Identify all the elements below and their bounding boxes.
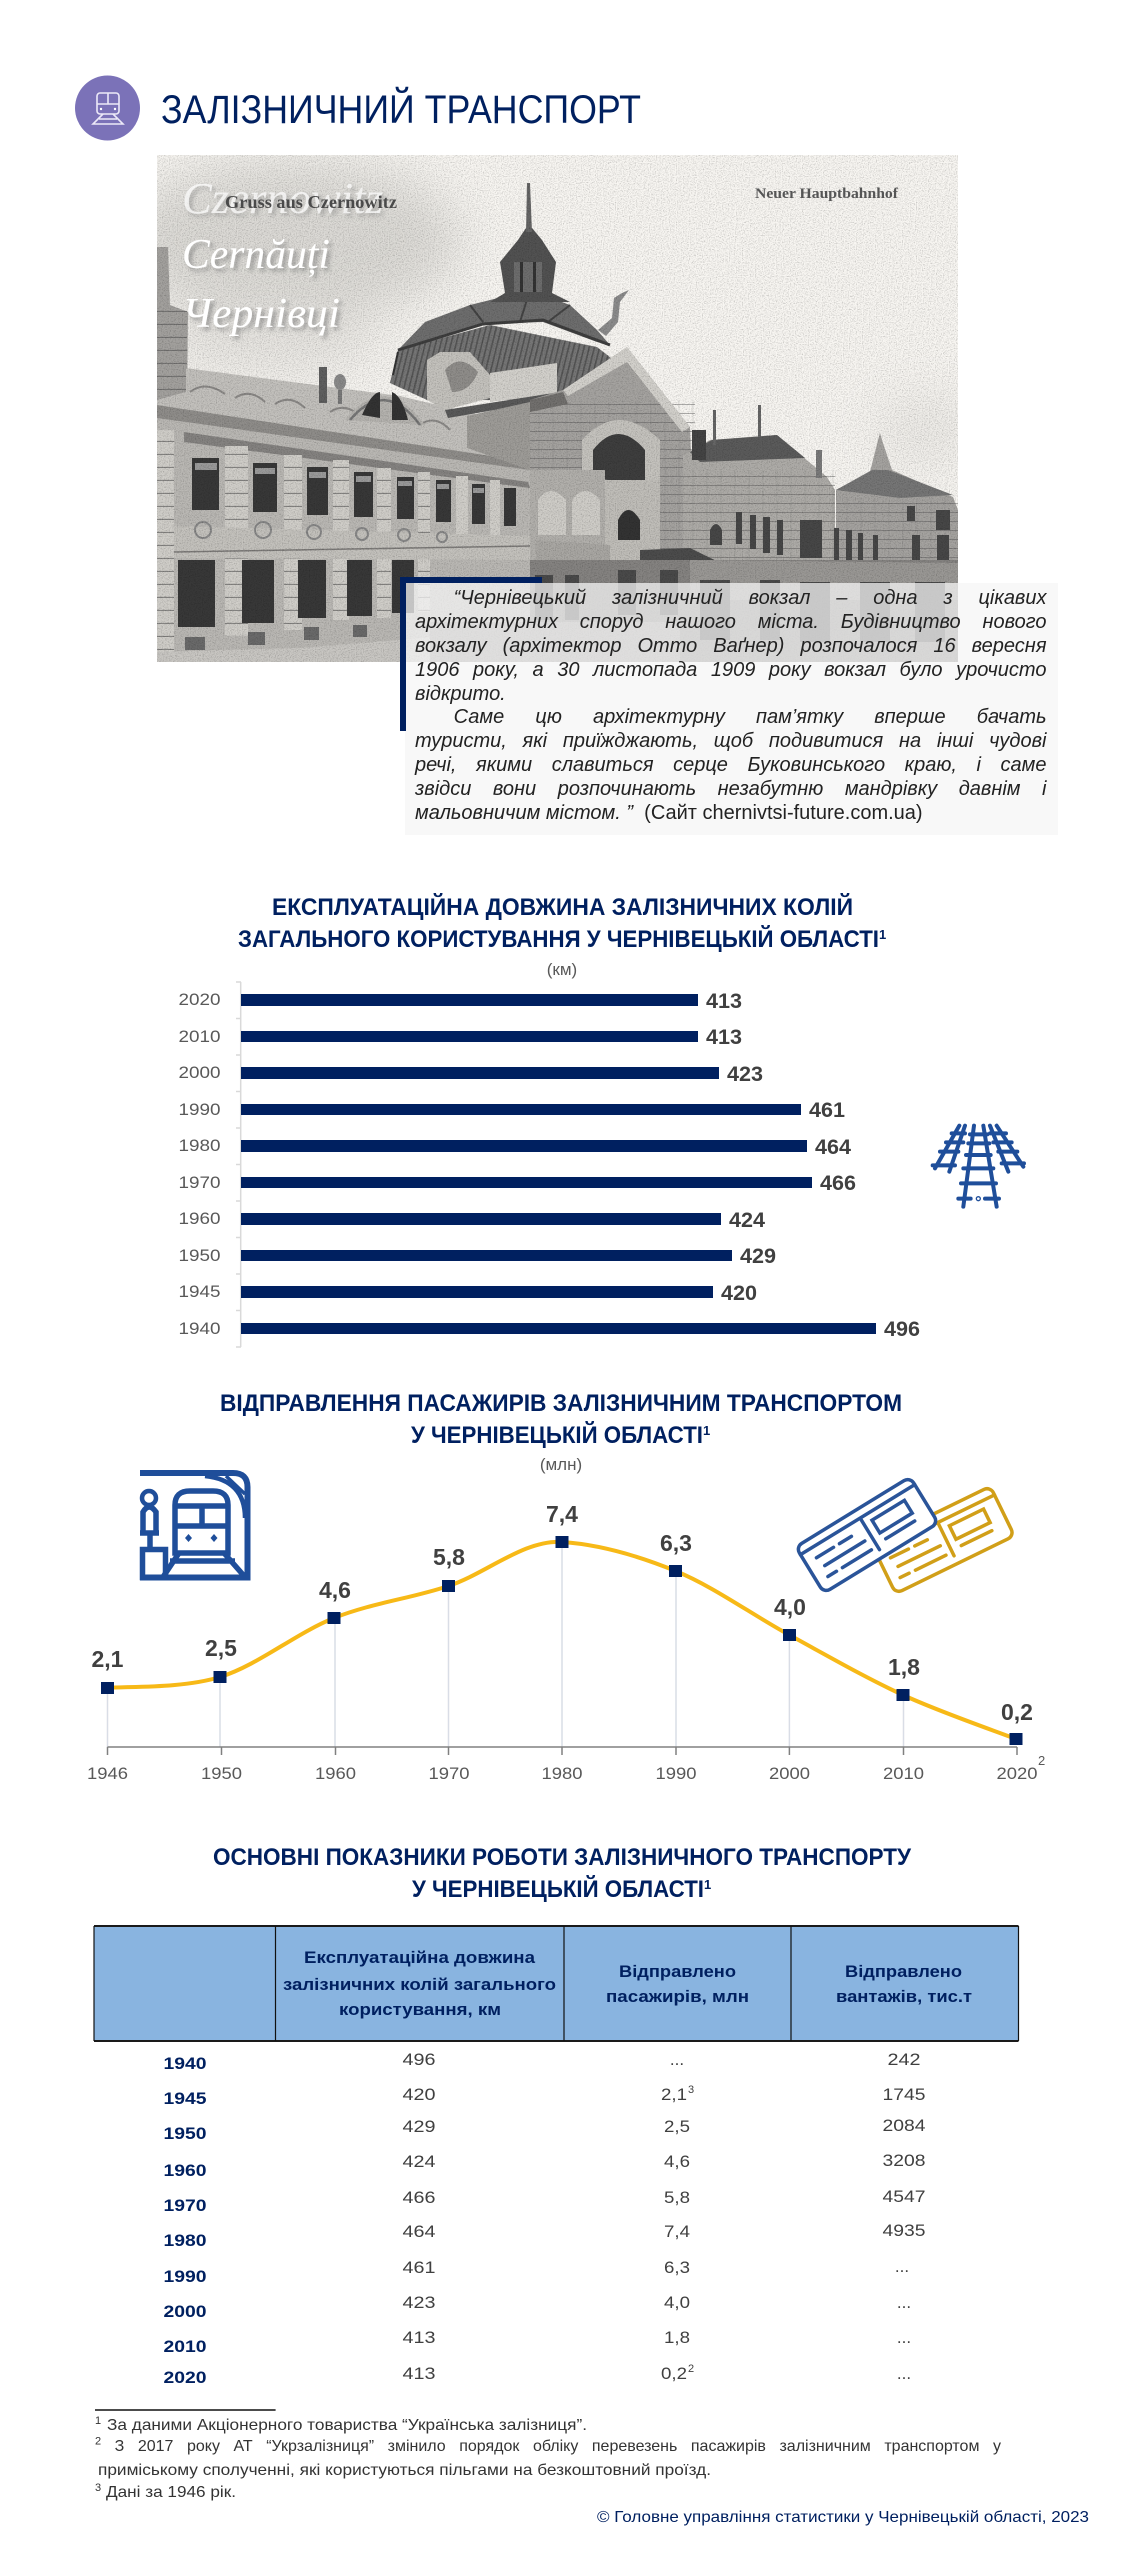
line chart: passengers: 2010 xyxy=(883,1764,924,1783)
sky clouds xyxy=(120,160,975,465)
dome roof xyxy=(400,298,608,348)
footnote 2, first line: 2 З 2017 року АТ “Укрзалізниця” змінило порядок обліку перевезень пасажирів залізничним транспортом у xyxy=(95,2436,1001,2455)
table column: passengers: 5,8 xyxy=(664,2188,690,2207)
table header: Відправлено xyxy=(619,1962,736,1981)
table header: користування, км xyxy=(339,2000,501,2019)
quote text: речі, якими славиться серце Буковинського краю, і саме xyxy=(415,754,1046,776)
line chart: passengers: 2 xyxy=(1038,1753,1045,1768)
bar chart: track length xyxy=(178,982,920,1347)
right wing windows xyxy=(710,506,950,563)
heading: passengers chart xyxy=(220,1390,902,1474)
table column: passengers: 2,5 xyxy=(664,2117,690,2136)
table column: freight: ... xyxy=(897,2293,911,2312)
bar chart: track length: 1945 xyxy=(178,1282,220,1301)
heading: table: 1 xyxy=(704,1877,711,1892)
bar chart: track length: 429 xyxy=(740,1245,776,1268)
bar chart: track length: 1950 xyxy=(178,1246,220,1265)
line chart: passengers: 1946 xyxy=(87,1764,128,1783)
quote text: 1906 року, а 30 листопада 1909 року вокзал було урочисто xyxy=(415,659,1046,681)
line chart: passengers: 5,8 xyxy=(433,1544,465,1570)
quote text: мальовничим містом. ” (Сайт chernivtsi-future.com.ua) xyxy=(415,802,923,824)
icon: gold ticket xyxy=(872,1486,1014,1594)
line chart: passengers: 2,1 xyxy=(92,1646,124,1672)
table column: passengers: 1,8 xyxy=(664,2328,690,2347)
table column: passengers xyxy=(661,2050,694,2383)
line chart: passengers: 2020 xyxy=(996,1764,1038,1783)
bar chart: track length: 1960 xyxy=(178,1209,220,1228)
window blinds xyxy=(195,463,484,493)
table years: 1945 xyxy=(164,2089,206,2108)
icon: train at station xyxy=(140,1473,248,1578)
right wing roof xyxy=(683,435,835,560)
table header xyxy=(94,1926,1018,2041)
table years: 1940 xyxy=(164,2054,206,2073)
bar chart: track length: 1980 xyxy=(178,1136,220,1155)
heading: passengers chart: 1 xyxy=(703,1423,710,1438)
chimney and urn xyxy=(319,367,327,403)
table column: length xyxy=(402,2050,436,2383)
table column: freight: 4935 xyxy=(882,2221,926,2240)
table column: length: 461 xyxy=(402,2258,436,2277)
footnotes: 1 xyxy=(95,2415,101,2427)
heading: track length chart: ЕКСПЛУАТАЦІЙНА ДОВЖИНА ЗАЛІЗНИЧНИХ КОЛІЙ xyxy=(272,893,853,921)
table years: 1980 xyxy=(164,2231,206,2250)
table years: 1970 xyxy=(164,2196,206,2215)
heading: passengers chart: (млн) xyxy=(540,1455,582,1474)
table years: 2020 xyxy=(164,2368,206,2387)
table column: freight: ... xyxy=(897,2328,911,2347)
heading: table: ОСНОВНІ ПОКАЗНИКИ РОБОТИ ЗАЛІЗНИЧНОГО ТРАНСПОРТУ xyxy=(213,1844,912,1871)
icon: rail tracks xyxy=(933,1126,1024,1207)
table column: passengers: 2,1 xyxy=(661,2085,687,2104)
bar chart: track length: 413 xyxy=(706,1026,742,1049)
heading: track length chart: ЗАГАЛЬНОГО КОРИСТУВАННЯ У ЧЕРНІВЕЦЬКІЙ ОБЛАСТІ xyxy=(238,925,879,953)
table column: length: 413 xyxy=(402,2364,436,2383)
line chart: passengers: 4,0 xyxy=(774,1594,806,1620)
photo: Chernivtsi railway station postcard: Cernăuți xyxy=(182,232,330,278)
bar chart: track length: 2020 xyxy=(178,990,220,1009)
wing roof xyxy=(157,368,490,456)
statue xyxy=(598,290,629,336)
line chart: passengers: 1990 xyxy=(656,1764,696,1783)
table column: freight: 3208 xyxy=(882,2151,926,2170)
heading: track length chart xyxy=(238,893,886,979)
table column: passengers: 4,6 xyxy=(664,2152,690,2171)
line chart: passengers: 1950 xyxy=(201,1764,242,1783)
table column: freight: ... xyxy=(895,2257,909,2276)
left tower xyxy=(157,247,188,410)
arch frame xyxy=(582,420,660,480)
band between floors xyxy=(174,526,530,560)
postcard captions: Czernowitz xyxy=(182,174,383,223)
table xyxy=(94,1926,1018,2387)
bar chart: track length: 464 xyxy=(815,1136,851,1159)
entrance canopy and lower dark xyxy=(640,548,714,560)
line chart: passengers: 1960 xyxy=(315,1764,356,1783)
copyright: © Головне управління статистики у Чернівецькій області, 2023 xyxy=(597,2509,1089,2526)
table column: passengers: 7,4 xyxy=(664,2222,690,2241)
title: ЗАЛІЗНИЧНИЙ ТРАНСПОРТ xyxy=(161,86,641,132)
table header: вантажів, тис.т xyxy=(836,1987,972,2006)
bar chart: track length: 496 xyxy=(884,1318,920,1341)
quote panel xyxy=(400,577,1048,824)
heading: track length chart: 1 xyxy=(879,927,886,942)
footnotes: приміському сполученні, які користуються пільгами на безкоштовний проїзд. xyxy=(98,2462,711,2479)
table column: freight: ... xyxy=(897,2364,911,2383)
line chart: passengers: 2000 xyxy=(769,1764,810,1783)
bar chart: track length: 466 xyxy=(820,1172,856,1195)
dome ornament xyxy=(427,352,490,410)
table years: 1990 xyxy=(164,2267,206,2286)
table column: length: 413 xyxy=(402,2328,436,2347)
quote text xyxy=(414,587,1047,824)
bar chart: track length: 420 xyxy=(721,1282,757,1305)
dark arch xyxy=(593,434,645,485)
table column: length: 466 xyxy=(402,2188,436,2207)
line chart: passengers: 2,5 xyxy=(205,1635,237,1661)
line chart: passengers: 4,6 xyxy=(319,1577,351,1603)
lantern xyxy=(490,228,570,302)
bar chart: track length: 424 xyxy=(729,1209,765,1232)
table column: passengers: 6,3 xyxy=(664,2258,690,2277)
table column: freight: 1745 xyxy=(882,2085,926,2104)
block under dome xyxy=(467,402,530,470)
table column: passengers: 4,0 xyxy=(664,2293,690,2312)
heading: table: У ЧЕРНІВЕЦЬКІЙ ОБЛАСТІ xyxy=(412,1875,704,1903)
table years: 2000 xyxy=(164,2302,206,2321)
icon: blue ticket xyxy=(796,1477,938,1593)
quote text: звідси вони розпочинають незабутню мандрівку давнім і xyxy=(415,778,1046,800)
lower windows xyxy=(178,560,215,627)
quote text: архітектурних споруд нашого міста. Будівництво нового xyxy=(415,611,1046,633)
quote text: туристи, які приїжджають, щоб подивитися на інші чудові xyxy=(415,730,1046,752)
photo: Chernivtsi railway station postcard: Neuer Hauptbahnhof xyxy=(755,186,899,202)
quote text: відкрито. xyxy=(415,683,506,705)
line chart: passengers: 0,2 xyxy=(1001,1699,1033,1725)
line chart: passengers: 7,4 xyxy=(546,1501,578,1527)
heading: passengers chart: У ЧЕРНІВЕЦЬКІЙ ОБЛАСТІ xyxy=(411,1421,703,1449)
bar chart: track length: 1970 xyxy=(178,1173,220,1192)
footnotes xyxy=(95,2410,711,2501)
table column: passengers: 3 xyxy=(688,2084,694,2096)
table column: freight: 242 xyxy=(888,2050,920,2069)
ground xyxy=(157,640,400,662)
parapet arch xyxy=(345,396,425,425)
dome drum xyxy=(390,325,620,400)
table column: length: 464 xyxy=(402,2222,436,2241)
line chart: passengers: 1980 xyxy=(542,1764,582,1783)
table column: length: 420 xyxy=(402,2085,436,2104)
footnotes: 3 xyxy=(95,2482,101,2494)
bar chart: track length: 2000 xyxy=(178,1063,220,1082)
pilasters xyxy=(157,430,500,662)
table header: Відправлено xyxy=(845,1962,962,1981)
heading: track length chart: (км) xyxy=(547,960,577,979)
table years: 2010 xyxy=(164,2337,206,2356)
quote text: “Чернівецький залізничний вокзал – одна з цікавих xyxy=(454,587,1046,609)
central block xyxy=(530,347,691,550)
table column: length: 424 xyxy=(402,2152,436,2171)
bar chart: track length: 413 xyxy=(706,990,742,1013)
right pavilion xyxy=(836,433,958,560)
bar chart: track length: 2010 xyxy=(178,1027,220,1046)
bar chart: track length: 1990 xyxy=(178,1100,220,1119)
table column: passengers: ... xyxy=(670,2050,684,2069)
table column: length: 423 xyxy=(402,2293,436,2312)
basement windows xyxy=(185,637,205,650)
footnotes: Дані за 1946 рік. xyxy=(106,2484,236,2501)
line chart: passengers xyxy=(87,1501,1045,1783)
line chart: passengers: 1970 xyxy=(428,1764,470,1783)
table years: 1950 xyxy=(164,2124,206,2143)
table header: залізничних колій загального xyxy=(283,1975,556,1994)
heading: table xyxy=(213,1844,912,1903)
table years: 1960 xyxy=(164,2161,206,2180)
quote text: Саме цю архітектурну пам’ятку вперше бачать xyxy=(454,706,1046,728)
table column: freight xyxy=(882,2050,926,2383)
photo: Chernivtsi railway station postcard xyxy=(120,155,975,667)
photo: Chernivtsi railway station postcard: Gruss aus Czernowitz xyxy=(225,192,397,212)
table column: passengers: 0,2 xyxy=(661,2364,687,2383)
bar chart: track length: 1940 xyxy=(178,1319,220,1338)
wing facade xyxy=(157,418,530,662)
upper windows xyxy=(178,458,516,650)
footnotes: За даними Акціонерного товариства “Українська залізниця”. xyxy=(107,2417,587,2434)
bar chart: track length: 461 xyxy=(809,1099,845,1122)
heading: passengers chart: ВІДПРАВЛЕННЯ ПАСАЖИРІВ ЗАЛІЗНИЧНИМ ТРАНСПОРТОМ xyxy=(220,1390,902,1417)
table column: length: 496 xyxy=(402,2050,436,2069)
table years xyxy=(164,2054,206,2387)
photo: Chernivtsi railway station postcard: Чернівці xyxy=(182,291,340,337)
table column: length: 429 xyxy=(402,2117,436,2136)
quote text: вокзалу (архітектор Отто Ваґнер) розпочалося 16 вересня xyxy=(415,635,1046,657)
spire xyxy=(526,183,532,232)
table column: passengers: 2 xyxy=(688,2363,694,2375)
header icon: train in circle xyxy=(75,76,140,140)
table column: freight: 4547 xyxy=(882,2187,926,2206)
line chart: passengers: 6,3 xyxy=(660,1530,692,1556)
bar chart: track length: 423 xyxy=(727,1063,763,1086)
table header: пасажирів, млн xyxy=(606,1987,749,2006)
line chart: passengers: 1,8 xyxy=(888,1654,920,1680)
central lower ornate xyxy=(530,470,605,570)
table header: Експлуатаційна довжина xyxy=(304,1948,536,1967)
table column: freight: 2084 xyxy=(882,2116,926,2135)
photo grain xyxy=(157,155,958,662)
